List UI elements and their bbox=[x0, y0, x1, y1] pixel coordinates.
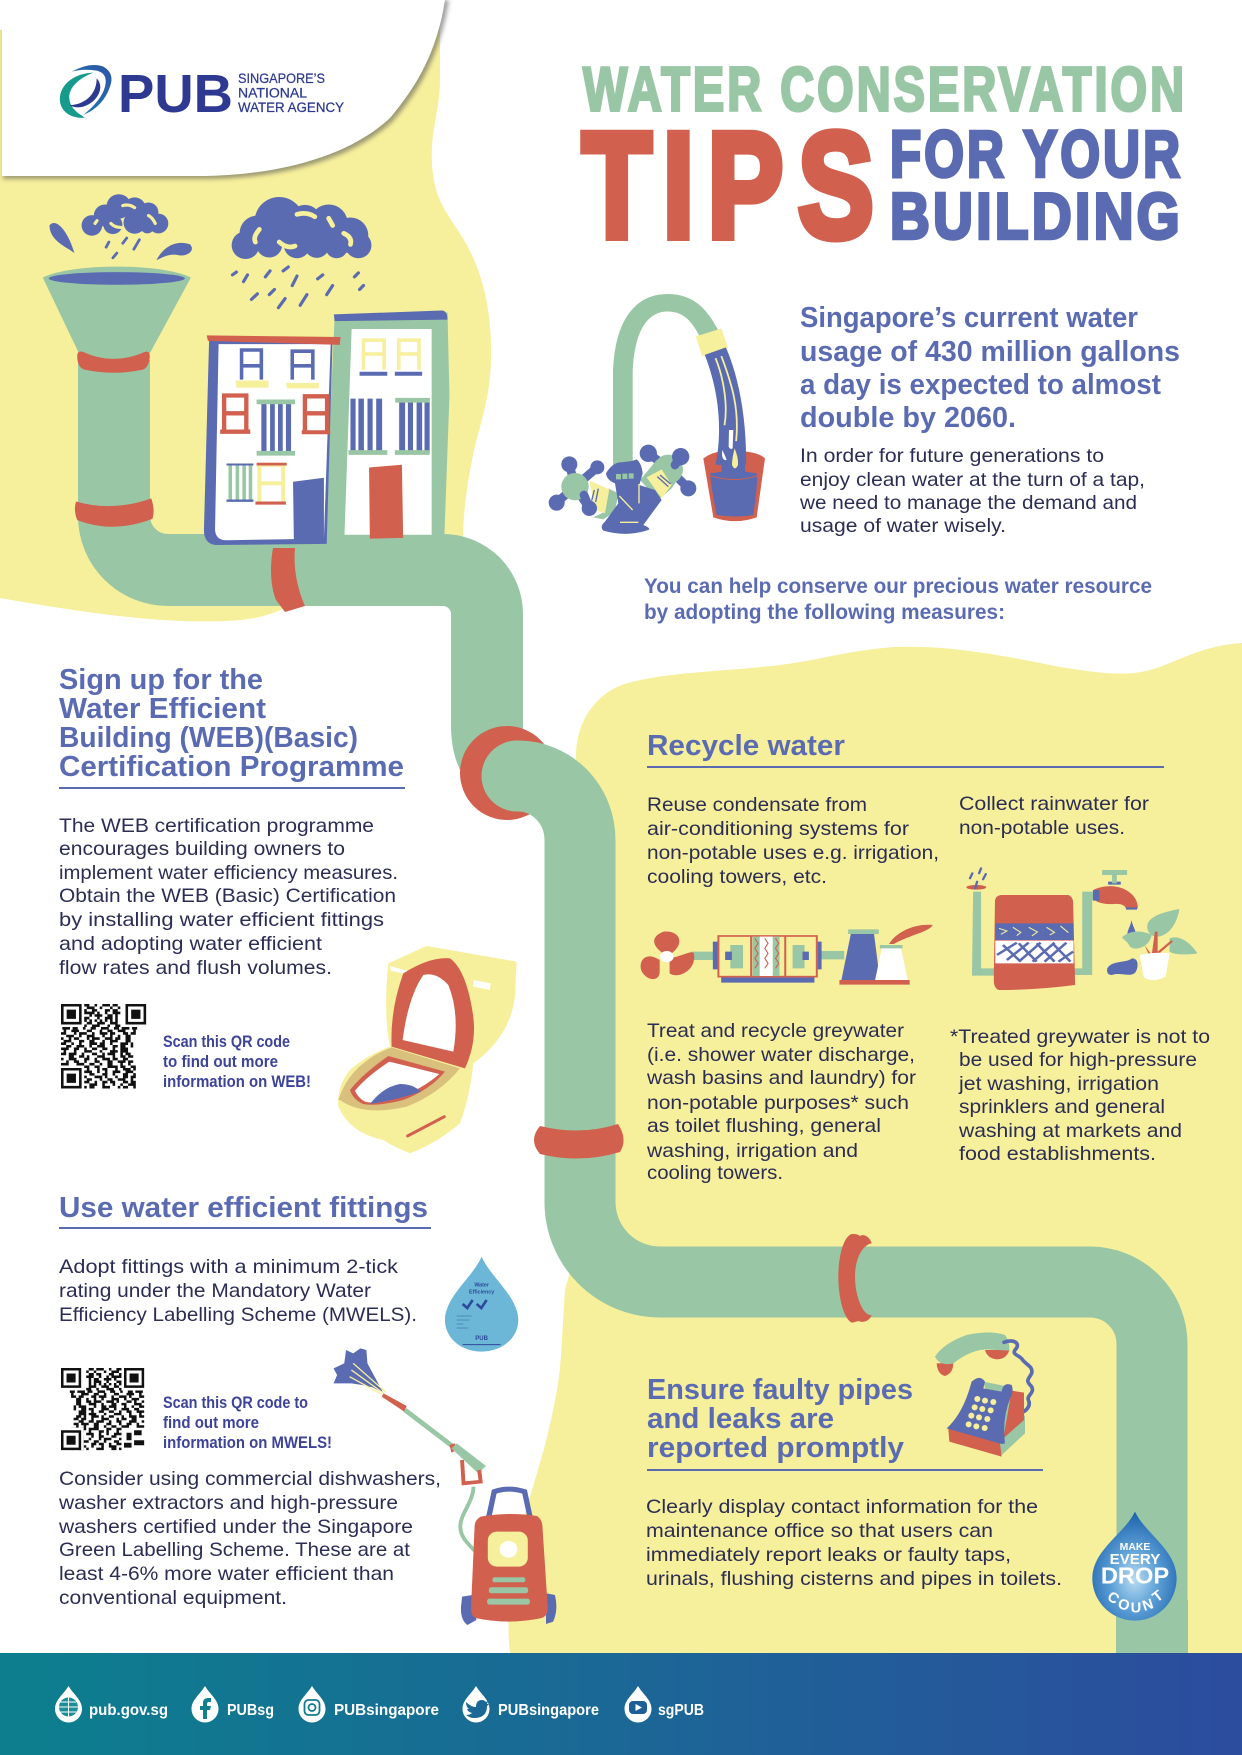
icon: water efficiency label drop: Water bbox=[474, 1283, 489, 1289]
blue shophouse bbox=[204, 335, 341, 545]
greywater text: washing, irrigation and bbox=[646, 1140, 858, 1162]
cup and water stream bbox=[703, 347, 765, 521]
greywater text: wash basins and laundry) for bbox=[646, 1067, 917, 1089]
social: facebook: PUBsg bbox=[227, 1702, 274, 1719]
logo wordmark: PUB bbox=[118, 65, 233, 124]
icon: water efficiency label drop bbox=[445, 1257, 518, 1352]
pipe coupling: under building ring bbox=[271, 548, 305, 612]
greywater footnote: sprinklers and general bbox=[959, 1096, 1165, 1118]
background: lower right yellow blob bbox=[508, 643, 1242, 1653]
icon: telephone bbox=[935, 1332, 1032, 1457]
heading: WEB certification: Water Efficient bbox=[59, 693, 266, 725]
greywater footnote: food establishments. bbox=[959, 1143, 1156, 1165]
greywater text: cooling towers. bbox=[647, 1162, 783, 1184]
logo tagline: WATER AGENCY bbox=[238, 100, 344, 115]
intro paragraph: enjoy clean water at the turn of a tap, bbox=[800, 469, 1145, 491]
icon: toilet bbox=[338, 946, 517, 1153]
greywater text bbox=[646, 1020, 917, 1184]
pipe coupling: vertical pipe ring bbox=[534, 1124, 624, 1159]
QR caption: MWELS: find out more bbox=[163, 1414, 259, 1432]
icon: make every drop count: T bbox=[1150, 1588, 1167, 1606]
report leaks body text: maintenance office so that users can bbox=[646, 1520, 993, 1542]
panel: recycle water bbox=[641, 730, 1210, 1184]
condensate text bbox=[647, 794, 939, 888]
WEB body text: by installing water efficient fittings bbox=[59, 909, 384, 931]
pipe ring bbox=[75, 498, 154, 527]
rainwater text: non-potable uses. bbox=[959, 817, 1125, 839]
condensate text: non-potable uses e.g. irrigation, bbox=[647, 842, 939, 864]
QR caption: MWELS bbox=[163, 1394, 332, 1452]
tap spout bbox=[623, 303, 728, 465]
WEB body text: implement water efficiency measures. bbox=[59, 862, 398, 884]
heading: WEB certification bbox=[59, 664, 405, 789]
QR caption: WEB bbox=[163, 1033, 311, 1091]
green label body text: washers certified under the Singapore bbox=[58, 1516, 413, 1538]
logo card bbox=[0, 0, 449, 179]
footer bar bbox=[0, 1653, 1242, 1755]
icon: high-pressure washer bbox=[334, 1348, 556, 1625]
social: youtube bbox=[624, 1686, 704, 1722]
logo tagline bbox=[238, 71, 344, 115]
social: website bbox=[55, 1686, 168, 1722]
illustration: tap filling a cup bbox=[549, 303, 765, 534]
water pipe: bottom end bbox=[1116, 1600, 1188, 1660]
intro paragraph: usage of water wisely. bbox=[800, 515, 1006, 537]
intro statement: a day is expected to almost bbox=[800, 369, 1161, 401]
QR caption: MWELS: information on MWELS! bbox=[163, 1434, 332, 1452]
green label body text: Consider using commercial dishwashers, bbox=[59, 1468, 441, 1490]
heading: WEB certification: Sign up for the bbox=[59, 664, 263, 696]
rainwater text bbox=[959, 793, 1150, 839]
report leaks body text bbox=[646, 1496, 1062, 1590]
rainwater text: Collect rainwater for bbox=[959, 793, 1150, 815]
icon: make every drop count: U bbox=[1131, 1601, 1141, 1617]
heading: report leaks bbox=[647, 1374, 1043, 1471]
intro paragraph bbox=[799, 445, 1145, 537]
QR code: MWELS bbox=[61, 1368, 144, 1450]
WEB body text: encourages building owners to bbox=[59, 838, 345, 860]
QR code: WEB bbox=[61, 1004, 146, 1088]
intro statement: double by 2060. bbox=[800, 402, 1016, 434]
water pipe: upper section bbox=[114, 360, 515, 775]
small cloud bbox=[82, 194, 168, 258]
social: instagram: PUBsingapore bbox=[334, 1702, 439, 1719]
condensate text: Reuse condensate from bbox=[647, 794, 867, 816]
QR caption: WEB: to find out more bbox=[163, 1053, 278, 1071]
report leaks body text: immediately report leaks or faulty taps, bbox=[646, 1544, 1011, 1566]
intro paragraph: In order for future generations to bbox=[800, 445, 1104, 467]
intro paragraph: we need to manage the demand and bbox=[799, 492, 1137, 514]
panel: WEB certification bbox=[59, 664, 517, 1153]
water splashes bbox=[50, 223, 192, 260]
icon: make every drop count bbox=[1092, 1512, 1177, 1621]
icon: water efficiency label drop: Efficiency bbox=[469, 1289, 494, 1295]
fittings body text: Adopt fittings with a minimum 2-tick bbox=[59, 1256, 398, 1278]
title BUILDING: BUILDING bbox=[890, 180, 1183, 252]
greywater text: (i.e. shower water discharge, bbox=[647, 1044, 915, 1066]
greywater footnote: *Treated greywater is not to bbox=[950, 1026, 1210, 1048]
WEB body text: flow rates and flush volumes. bbox=[59, 957, 332, 979]
WEB body text: Obtain the WEB (Basic) Certification bbox=[59, 885, 396, 907]
icon: make every drop count: MAKE bbox=[1120, 1542, 1151, 1553]
fittings body text: rating under the Mandatory Water bbox=[59, 1280, 372, 1302]
icon: make every drop count: EVERY bbox=[1110, 1552, 1161, 1568]
social: youtube: sgPUB bbox=[658, 1702, 704, 1719]
social: facebook bbox=[192, 1686, 274, 1722]
green label body text: conventional equipment. bbox=[59, 1587, 287, 1609]
social: twitter bbox=[462, 1686, 599, 1722]
green shophouse bbox=[325, 310, 449, 542]
condensate text: cooling towers, etc. bbox=[647, 866, 827, 888]
QR caption: WEB: information on WEB! bbox=[163, 1073, 311, 1091]
report leaks body text: urinals, flushing cisterns and pipes in toilets. bbox=[646, 1568, 1062, 1590]
report leaks body text: Clearly display contact information for the bbox=[646, 1496, 1038, 1518]
logo swirl bbox=[60, 65, 111, 118]
green label body text bbox=[58, 1468, 441, 1609]
illustration: rain clouds, funnel and shophouses bbox=[43, 194, 449, 545]
heading: WEB certification: Certification Programme bbox=[59, 751, 404, 783]
greywater footnote: washing at markets and bbox=[958, 1120, 1182, 1142]
WEB body text bbox=[59, 815, 398, 979]
icon: water efficiency label drop: PUB bbox=[475, 1336, 489, 1342]
greywater text: non-potable purposes* such bbox=[647, 1092, 909, 1114]
heading: report leaks: Ensure faulty pipes bbox=[647, 1374, 913, 1406]
water pipe: lower section bbox=[517, 776, 1152, 1653]
icon: rainwater harvesting bbox=[966, 868, 1197, 990]
heading: report leaks: and leaks are bbox=[647, 1403, 834, 1435]
WEB body text: and adopting water efficient bbox=[59, 933, 323, 955]
icon: condensate recovery system bbox=[641, 925, 933, 985]
large cloud bbox=[232, 197, 371, 259]
background: top yellow blob bbox=[0, 0, 491, 621]
fittings body text: Efficiency Labelling Scheme (MWELS). bbox=[59, 1304, 417, 1326]
funnel bbox=[43, 267, 191, 364]
rain drops bbox=[232, 267, 364, 308]
panel: report leaks bbox=[646, 1332, 1062, 1590]
funnel ring bbox=[77, 352, 150, 373]
heading: WEB certification: Building (WEB)(Basic) bbox=[59, 722, 358, 754]
green label body text: Green Labelling Scheme. These are at bbox=[59, 1539, 411, 1561]
panel: water efficient fittings bbox=[58, 1192, 556, 1625]
condensate text: air-conditioning systems for bbox=[647, 818, 910, 840]
icon: make every drop count: N bbox=[1141, 1596, 1156, 1615]
title bbox=[582, 56, 1187, 270]
QR caption: MWELS: Scan this QR code to bbox=[163, 1394, 308, 1412]
WEB body text: The WEB certification programme bbox=[59, 815, 374, 837]
green label body text: least 4-6% more water efficient than bbox=[59, 1563, 394, 1585]
greywater footnote: jet washing, irrigation bbox=[958, 1073, 1159, 1095]
call to action bbox=[644, 575, 1152, 624]
intro statement bbox=[800, 302, 1180, 434]
intro statement: usage of 430 million gallons bbox=[800, 336, 1180, 368]
greywater text: as toilet flushing, general bbox=[647, 1115, 881, 1137]
intro statement: Singapore’s current water bbox=[800, 302, 1138, 334]
pipe coupling: horizontal pipe ring bbox=[838, 1234, 872, 1323]
greywater text: Treat and recycle greywater bbox=[647, 1020, 905, 1042]
social: twitter: PUBsingapore bbox=[498, 1702, 599, 1719]
logo tagline: NATIONAL bbox=[238, 86, 308, 100]
logo tagline: SINGAPORE’S bbox=[238, 71, 325, 86]
call to action: by adopting the following measures: bbox=[644, 601, 1005, 624]
QR caption: WEB: Scan this QR code bbox=[163, 1033, 290, 1051]
heading: report leaks: reported promptly bbox=[647, 1432, 904, 1464]
tap handles and body bbox=[549, 445, 696, 534]
pipe coupling: elbow ring bbox=[460, 726, 554, 820]
green label body text: washer extractors and high-pressure bbox=[58, 1492, 398, 1514]
heading: recycle water: Recycle water bbox=[647, 730, 845, 762]
social: instagram bbox=[298, 1686, 439, 1722]
icon: make every drop count: C bbox=[1104, 1589, 1122, 1608]
greywater footnote: be used for high-pressure bbox=[959, 1049, 1197, 1071]
social: website: pub.gov.sg bbox=[89, 1702, 168, 1719]
icon: make every drop count: DROP bbox=[1101, 1562, 1169, 1588]
greywater footnote bbox=[950, 1026, 1210, 1165]
fittings body text bbox=[59, 1256, 417, 1326]
icon: make every drop count: O bbox=[1116, 1596, 1131, 1615]
call to action: You can help conserve our precious water resource bbox=[644, 575, 1152, 598]
PUB logo bbox=[60, 65, 344, 124]
heading: fittings: Use water efficient fittings bbox=[59, 1192, 428, 1224]
title TIPS: TIPS bbox=[582, 102, 874, 270]
